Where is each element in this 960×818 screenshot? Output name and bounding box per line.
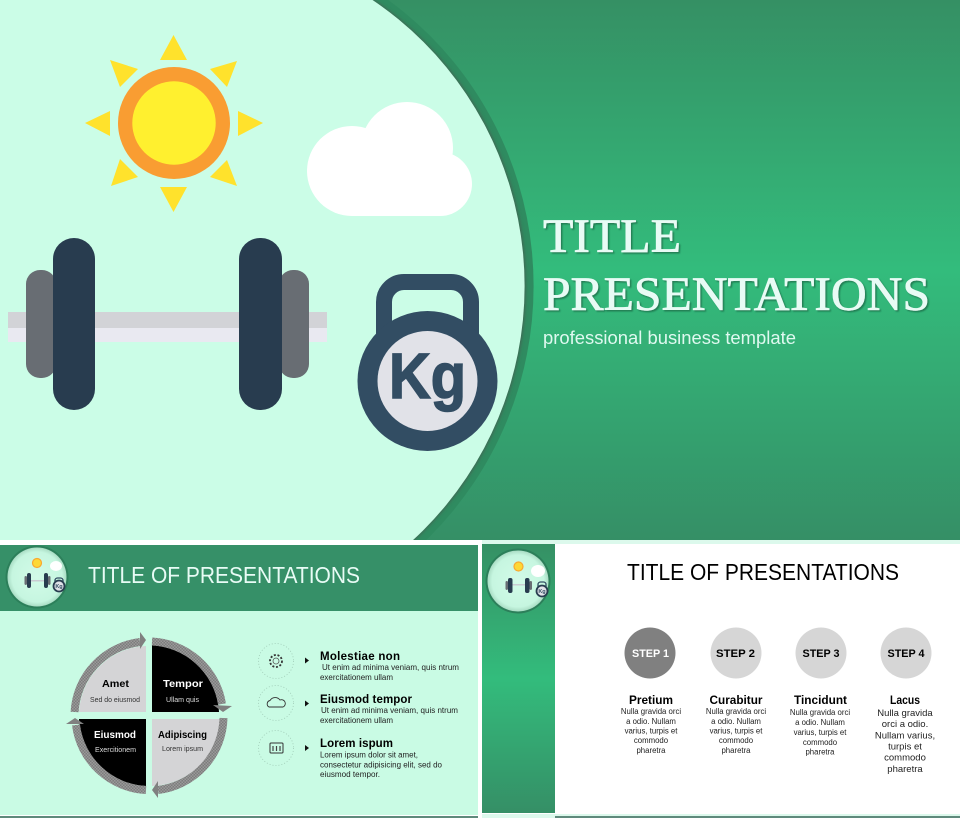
list item: Lorem ispum: consectetur adipisicing elit, sed do: [320, 760, 443, 770]
hero title: PRESENTATIONS: [543, 268, 930, 321]
step 3: [790, 628, 850, 756]
segment: Eiusmod: Eiusmod: [94, 729, 136, 741]
mint circle: [0, 0, 525, 540]
segment: Adipiscing: [152, 718, 224, 798]
slide logo: Kg: [538, 589, 546, 595]
list item: Molestiae non: Molestiae non: [320, 651, 400, 663]
step 4: Nullam varius,: [875, 730, 935, 742]
list item: Lorem ispum: eiusmod tempor.: [320, 770, 380, 779]
hero subtitle: professional business template: [543, 327, 796, 348]
panel frame: [482, 540, 960, 818]
step 4: commodo: [884, 752, 926, 764]
slide background: [0, 545, 478, 815]
slide logo: [6, 546, 68, 608]
step 1: commodo: [634, 736, 669, 745]
list item: Eiusmod tempor: exercitationem ullam: [320, 716, 393, 725]
step 3: commodo: [803, 738, 838, 747]
step 1: STEP 1: [632, 648, 669, 660]
step 1: [621, 628, 681, 755]
step 1: Pretium: [629, 695, 673, 707]
segment: Amet: Sed do eiusmod: [90, 695, 140, 704]
icon: sun: [85, 35, 263, 212]
bottom edge strip: [0, 816, 960, 818]
segment: Amet: [75, 632, 146, 712]
segment: Tempor: [152, 642, 232, 712]
slide logo: [486, 548, 550, 614]
step 4: turpis et: [888, 742, 922, 752]
slide title: TITLE OF PRESENTATIONS: [88, 562, 360, 588]
step 3: pharetra: [805, 748, 835, 756]
segment: Tempor: Ullam quis: [166, 695, 199, 704]
step 4: STEP 4: [888, 648, 925, 660]
step 4: pharetra: [887, 764, 923, 775]
segment: Adipiscing: Adipiscing: [158, 729, 207, 741]
slide logo: Kg: [55, 584, 63, 590]
icon: kettlebell: [358, 282, 498, 451]
list item: Lorem ispum: [258, 730, 443, 779]
list item: Molestiae non: Ut enim ad minima veniam, quis ntrum: [322, 663, 459, 672]
circle shadow: [373, 0, 527, 540]
segment: Adipiscing: Lorem ipsum: [162, 744, 203, 753]
step 4: orci a odio.: [882, 719, 928, 730]
curved band: [404, 19, 534, 516]
step 1: a odio. Nullam: [626, 717, 676, 726]
segment: Tempor: Tempor: [163, 678, 203, 690]
step 4: [875, 628, 935, 775]
step 3: STEP 3: [802, 648, 840, 660]
cycle chart: [66, 632, 232, 798]
panel: steps slide: [482, 540, 960, 818]
step 2: pharetra: [721, 746, 751, 755]
panel: cycle slide: [0, 545, 478, 815]
step 1: Nulla gravida orci: [621, 707, 681, 716]
hero panel: [0, 0, 960, 540]
list item: Eiusmod tempor: Ut enim ad minima veniam, quis ntrum: [321, 706, 458, 715]
slide background: [482, 544, 960, 814]
step 2: commodo: [719, 736, 754, 745]
list item: Eiusmod tempor: [258, 686, 458, 725]
list item: Molestiae non: [258, 644, 459, 682]
hero green background: [388, 0, 960, 540]
segment: Amet: Amet: [102, 678, 130, 690]
step 3: varius, turpis et: [794, 728, 847, 737]
step 3: Tincidunt: [794, 695, 847, 707]
slide title: TITLE OF PRESENTATIONS: [627, 559, 899, 585]
icon: barbell: [8, 238, 327, 410]
slide header: [0, 545, 478, 611]
hero title: TITLE: [543, 210, 681, 263]
icon: kettlebell: Kg: [389, 340, 466, 412]
step 2: a odio. Nullam: [711, 717, 761, 726]
list item: Lorem ispum: Lorem ipsum dolor sit amet,: [320, 750, 418, 760]
list item: Lorem ispum: Lorem ispum: [320, 738, 393, 750]
segment: Eiusmod: Exercitionem: [95, 745, 136, 754]
step 1: pharetra: [636, 746, 666, 755]
step 2: varius, turpis et: [710, 726, 763, 736]
step 2: [706, 628, 766, 755]
hero title: [543, 210, 930, 321]
step 2: Nulla gravida orci: [706, 707, 766, 716]
list item: Molestiae non: exercitationem ullam: [320, 673, 393, 682]
step 2: STEP 2: [716, 648, 755, 660]
step 1: varius, turpis et: [625, 726, 678, 736]
icon: cloud: [307, 102, 472, 216]
step 3: Nulla gravida orci: [790, 708, 850, 717]
step 2: Curabitur: [710, 695, 763, 707]
sidebar: [482, 544, 555, 813]
list item: Eiusmod tempor: Eiusmod tempor: [320, 694, 413, 706]
segment: Eiusmod: [66, 718, 146, 790]
step 4: Lacus: [890, 695, 920, 707]
step 3: a odio. Nullam: [795, 718, 845, 727]
step 4: Nulla gravida: [877, 708, 933, 719]
